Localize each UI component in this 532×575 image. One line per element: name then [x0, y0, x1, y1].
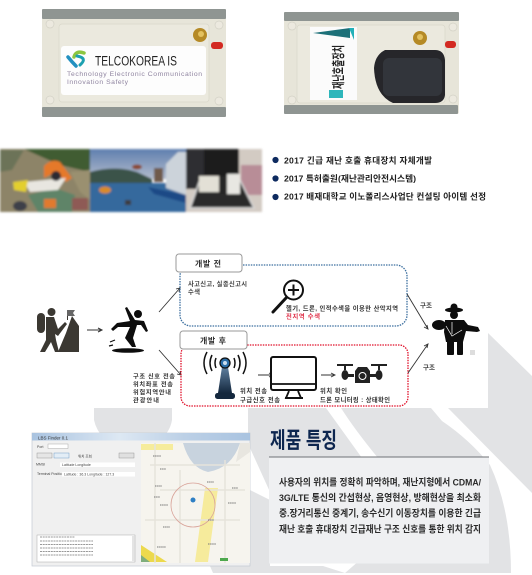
before text: 사고신고, 실종신고시: [188, 279, 247, 288]
features text: [279, 476, 481, 536]
features text: 중.장거리통신 중계기, 송수신기 이동장치를 이용한 긴급: [279, 508, 481, 520]
tower caption: 위치 전송: [240, 386, 267, 395]
panel: after development: [180, 331, 408, 406]
drone caption: 위치 확인: [320, 386, 347, 395]
icon: drone: [337, 364, 387, 383]
panel: before development: [176, 254, 407, 326]
sent-signal list: [133, 372, 175, 404]
manual search text: [286, 304, 398, 320]
before text: 수색: [188, 287, 200, 296]
rotated label: [310, 27, 357, 100]
window title bar: [32, 433, 250, 440]
heading: 제품 특징: [270, 428, 337, 453]
window title bar: LBS Finder 0.1: [38, 436, 69, 440]
tower caption: [240, 386, 280, 404]
icon: falling person: [109, 307, 148, 353]
logo mark: [68, 52, 84, 66]
drone caption: [320, 386, 390, 404]
arrow: monitor to drone: [321, 373, 335, 377]
form controls: Latitude Longitude: [62, 463, 91, 467]
sent-signal list: 위험지역안내: [133, 388, 171, 396]
arrow: search to rescue: [407, 294, 428, 329]
device photo: front with label: [42, 9, 226, 117]
panel label: before development: 개발 전: [195, 258, 221, 268]
panel label: before development: [176, 254, 242, 272]
map: [141, 443, 250, 563]
device photo: back with antenna module: 재난호출장치: [331, 45, 346, 89]
sent-signal list: 위치좌표 전송: [133, 380, 173, 388]
features text: 3G/LTE 통신의 간섭현상, 음영현상, 방해현상을 최소화: [279, 492, 481, 504]
icon: monitor: [271, 357, 316, 399]
device photo: back with antenna module: [284, 12, 459, 114]
manual search text: 전지역 수색: [286, 312, 320, 320]
icon: hiker and mountain: [37, 308, 79, 352]
bullet: selection: 2017 배재대학교 이노폴리스사업단 컨설팅 아이템 선정: [284, 190, 486, 202]
tagline: Technology Electronic Communication: [67, 71, 202, 78]
features text: 사용자의 위치를 정확히 파악하며, 재난지형에서 CDMA/: [279, 476, 481, 488]
form controls: MMSI: [36, 462, 45, 466]
rescue label bottom: 구조: [423, 364, 435, 372]
form controls: Terminal Position: [37, 472, 64, 476]
sent-signal list: 관광안내: [133, 396, 159, 404]
form controls: Latitude : 36.3 Longitude : 127.3: [64, 472, 114, 476]
rescue label top: 구조: [420, 302, 432, 310]
drone caption: 드론 모니터링 : 상태확인: [320, 395, 390, 404]
panel label: after development: 개발 후: [200, 336, 227, 346]
icon: magnifier: [273, 280, 303, 312]
arrow: to before-development: [159, 288, 180, 312]
antenna module: [374, 50, 445, 103]
features text: 재난 호출 휴대장치 긴급재난 구조 신호를 통한 위치 감지: [279, 524, 481, 536]
background swoosh shapes: [94, 333, 532, 573]
tagline: Innovation Safety: [67, 79, 129, 86]
before text: [188, 279, 247, 296]
brand name: TELCOKOREA IS: [95, 54, 177, 68]
tower caption: 구급신호 전송: [240, 395, 280, 404]
panel: product features: [269, 458, 489, 564]
photo: equipment case: [186, 149, 262, 212]
log box: [37, 535, 135, 562]
arrow: tower to monitor: [258, 373, 273, 377]
form controls: Port: [37, 445, 43, 449]
panel label: after development: [180, 331, 247, 349]
tagline: [67, 71, 202, 86]
photo: rescue on rocks: [0, 149, 90, 212]
photo: rescue boat: [90, 149, 186, 212]
heading rule: [269, 456, 489, 458]
manual search text: 헬기, 드론, 인적수색을 이용한 산악지역: [286, 304, 398, 312]
screenshot: location software: [32, 433, 250, 566]
arrow: monitoring to rescue: [408, 344, 428, 373]
form controls: 위치 조회: [78, 454, 92, 458]
arrow: to after-development: [159, 350, 181, 375]
arrow: hiker to fall: [87, 328, 102, 332]
icon: signal tower: [204, 352, 246, 399]
icon: firefighter with person: [432, 304, 480, 355]
bullet: development: 2017 긴급 재난 호출 휴대장치 자체개발: [284, 154, 432, 166]
form controls: [36, 444, 135, 476]
bullet: patent: 2017 특허출원(재난관리안전시스템): [284, 172, 416, 184]
bullet list: [272, 154, 486, 202]
sent-signal list: 구조 신호 전송: [133, 372, 175, 380]
photo strip: rescue scene, boat, equipment case: [0, 149, 262, 212]
